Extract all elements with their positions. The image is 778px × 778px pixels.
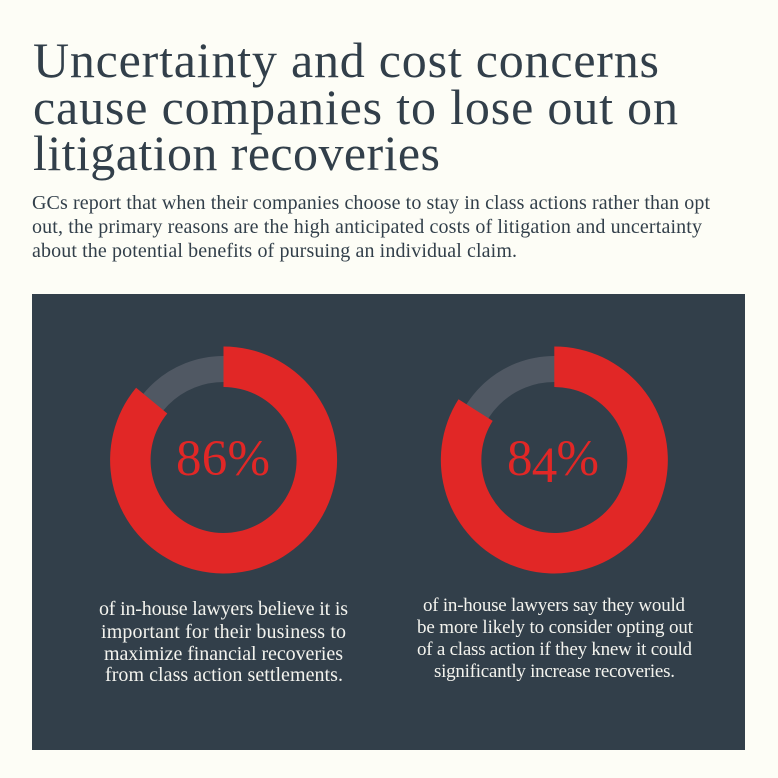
caption: 84% statistic: of a class action if they knew it could — [417, 639, 692, 660]
intro text: out, the primary reasons are the high anticipated costs of litigation and uncertainty — [32, 216, 702, 238]
caption: 84% statistic: significantly increase recoveries. — [434, 661, 675, 682]
donut chart: 84% — [441, 346, 668, 573]
value: 84%: % — [557, 431, 599, 487]
value: 84%: 8 — [507, 431, 532, 487]
caption: 86% statistic — [99, 598, 348, 686]
title — [33, 32, 678, 181]
intro text: GCs report that when their companies choose to stay in class actions rather than opt — [32, 192, 710, 214]
title: cause companies to lose out on — [33, 79, 678, 135]
value: 86%: 86% — [176, 431, 270, 487]
caption: 86% statistic: maximize financial recoveries — [104, 643, 343, 665]
caption: 86% statistic: important for their business to — [101, 621, 346, 643]
panel: statistics — [32, 294, 745, 750]
caption: 84% statistic: be more likely to consider opting out — [417, 617, 694, 638]
value: 84%: 4 — [532, 438, 557, 494]
intro text — [32, 192, 710, 262]
title: litigation recoveries — [33, 125, 440, 181]
caption: 84% statistic: of in-house lawyers say they would — [423, 595, 686, 616]
donut chart: 86% — [110, 346, 337, 574]
title: Uncertainty and cost concerns — [33, 32, 659, 88]
intro text: about the potential benefits of pursuing an individual claim. — [32, 240, 517, 262]
caption: 86% statistic: from class action settlements. — [105, 664, 343, 686]
caption: 86% statistic: of in-house lawyers believe it is — [99, 598, 348, 620]
caption: 84% statistic — [417, 595, 694, 682]
